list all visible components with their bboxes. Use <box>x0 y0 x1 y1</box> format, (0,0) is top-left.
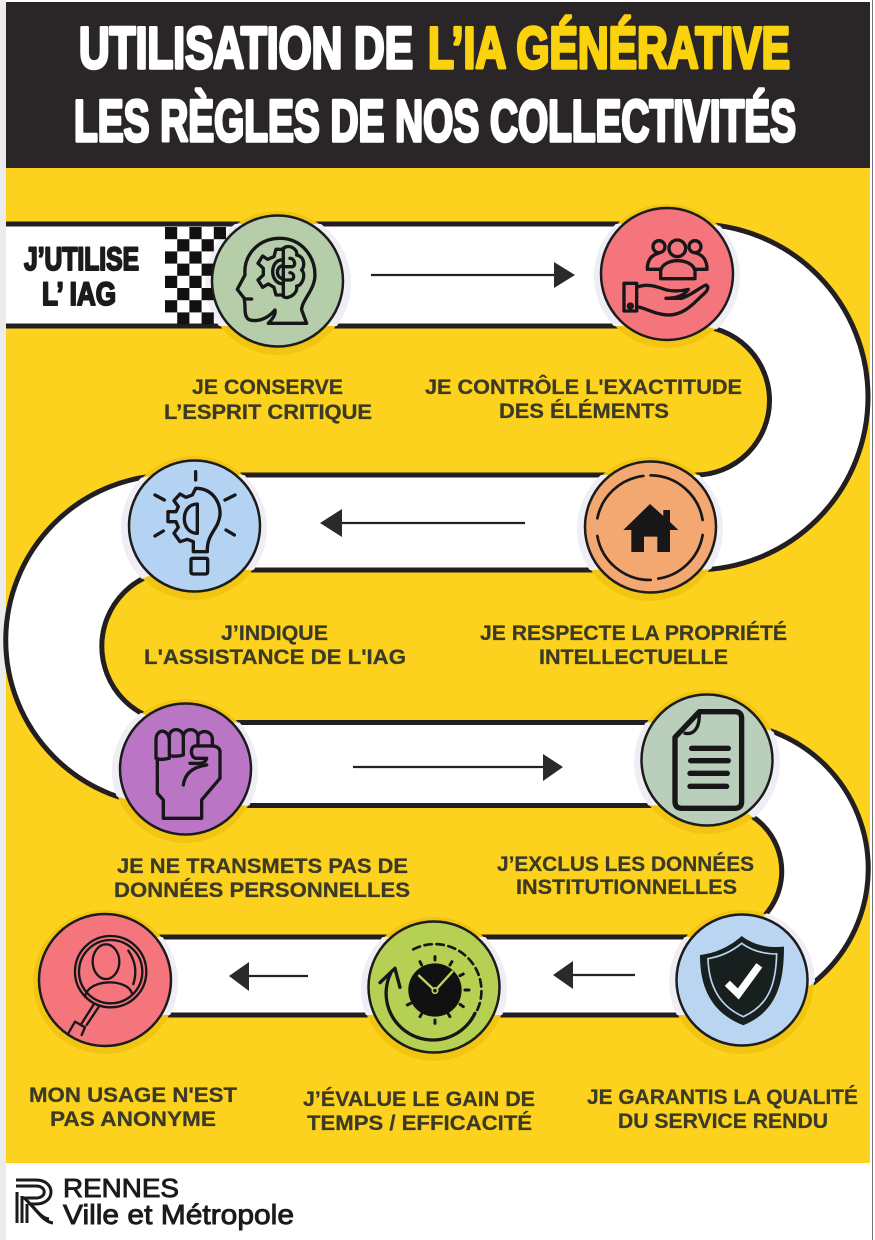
caption 6: INSTITUTIONNELLES <box>516 876 737 899</box>
caption 8 <box>303 1088 535 1135</box>
title <box>74 16 796 154</box>
badge: institutional data <box>642 694 772 826</box>
start label <box>24 241 139 312</box>
icon: clock with arrow <box>380 944 481 1040</box>
arrow 5 <box>229 962 308 991</box>
winding road <box>6 224 868 1015</box>
caption 8: J’ÉVALUE LE GAIN DE <box>303 1088 535 1111</box>
caption 9 <box>29 1084 237 1131</box>
caption 4 <box>144 622 406 669</box>
badge: state AI assistance <box>129 460 260 592</box>
caption 4: J’INDIQUE <box>221 622 328 645</box>
badge: intellectual property <box>585 462 716 592</box>
caption 4: L'ASSISTANCE DE L'IAG <box>144 646 406 669</box>
yellow background panel <box>6 168 870 1163</box>
caption 1: JE CONSERVE <box>192 376 343 399</box>
caption 1: L’ESPRIT CRITIQUE <box>164 401 372 424</box>
header panel <box>6 2 870 168</box>
caption 7: DU SERVICE RENDU <box>618 1110 828 1133</box>
badge: verify accuracy <box>601 208 733 340</box>
icon: magnifying glass over person <box>68 936 146 1035</box>
arrow 1 <box>371 262 575 288</box>
arrow 4 <box>553 961 635 989</box>
icon: house in dashed ring <box>597 475 703 580</box>
captions <box>29 375 858 1135</box>
caption 3: INTELLECTUELLE <box>539 646 728 669</box>
arrow 3 <box>353 754 563 781</box>
badge: time saved <box>368 922 500 1052</box>
icon: shield with check <box>700 936 784 1025</box>
icon: raised fist <box>156 730 220 818</box>
title line 1 white: UTILISATION DE <box>79 16 413 81</box>
caption 7: JE GARANTIS LA QUALITÉ <box>587 1086 858 1109</box>
caption 2 <box>425 375 742 423</box>
caption 5: DONNÉES PERSONNELLES <box>114 879 410 902</box>
caption 2: JE CONTRÔLE L'EXACTITUDE <box>425 375 742 399</box>
logo mark <box>16 1180 53 1223</box>
badge: service quality <box>676 914 808 1046</box>
icon: hand holding people <box>624 240 708 315</box>
badge: not anonymous <box>39 914 171 1046</box>
icon: head with brain and gear <box>237 238 315 323</box>
caption 3 <box>480 622 787 669</box>
caption 9: PAS ANONYME <box>50 1108 216 1131</box>
badge halos <box>32 203 815 1062</box>
caption 6: J’EXCLUS LES DONNÉES <box>497 853 754 876</box>
caption 5 <box>114 855 410 902</box>
icon: light bulb with gear <box>155 472 235 574</box>
caption 7 <box>587 1086 858 1133</box>
logo wordmark line 1: RENNES <box>63 1173 179 1203</box>
caption 3: JE RESPECTE LA PROPRIÉTÉ <box>480 622 787 645</box>
badge: no personal data <box>120 704 251 834</box>
badge: critical thinking <box>212 216 343 346</box>
footer logo <box>16 1173 294 1230</box>
caption 9: MON USAGE N'EST <box>29 1084 237 1107</box>
caption 2: DES ÉLÉMENTS <box>499 400 669 423</box>
checkered flag <box>165 227 226 324</box>
logo wordmark line 2: Ville et Métropole <box>63 1199 294 1230</box>
caption 1 <box>164 376 372 424</box>
caption 6 <box>497 853 754 899</box>
arrow 2 <box>320 509 525 537</box>
start label line 2: L’ IAG <box>42 276 116 312</box>
icon: document <box>675 712 742 808</box>
caption 5: JE NE TRANSMETS PAS DE <box>117 855 408 878</box>
caption 8: TEMPS / EFFICACITÉ <box>307 1112 532 1135</box>
start label line 1: J’UTILISE <box>24 241 139 277</box>
